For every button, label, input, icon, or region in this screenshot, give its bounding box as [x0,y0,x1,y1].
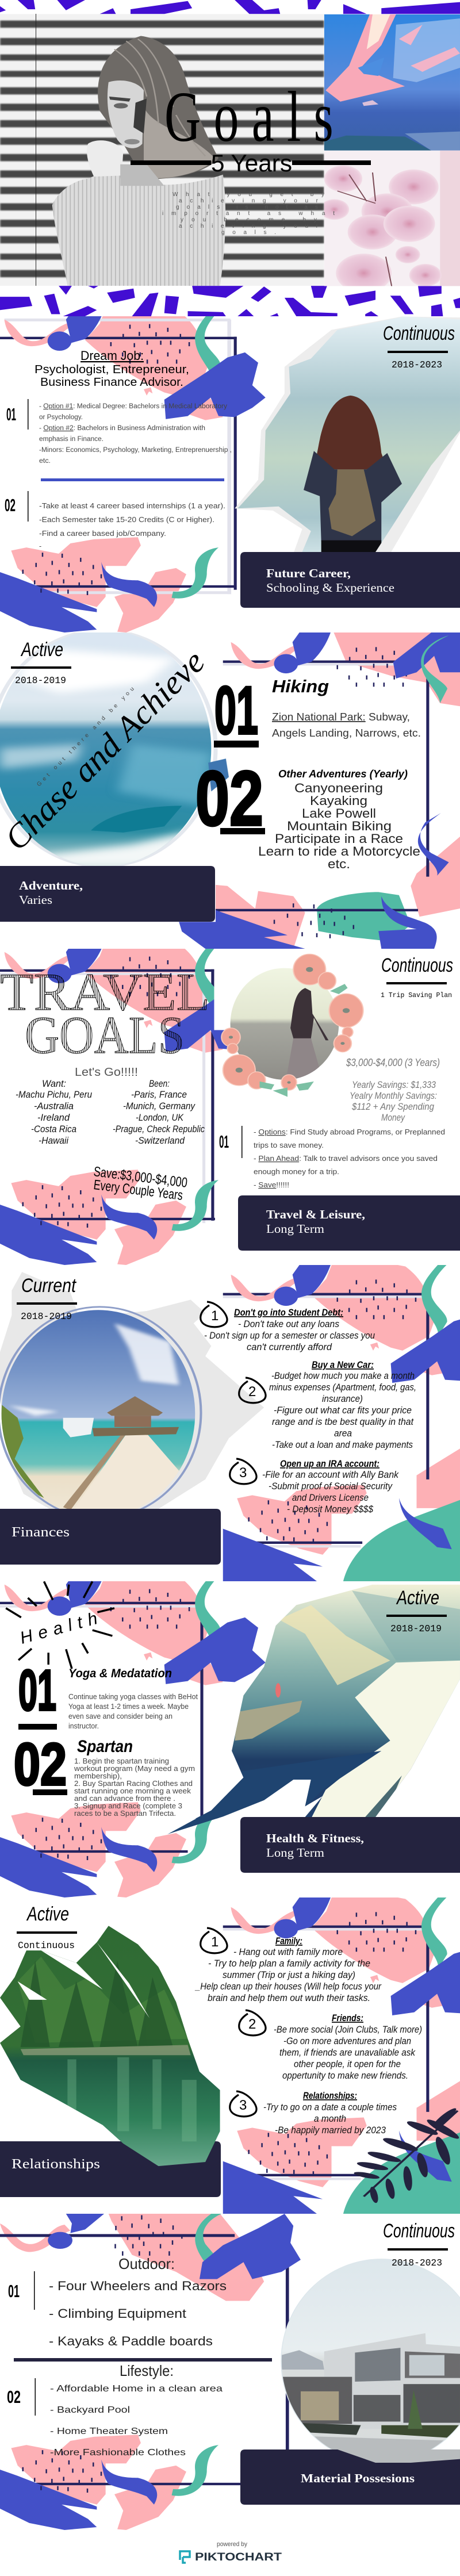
status: Active: Active [396,1587,439,1609]
section: family: summer (Trip or just a hiking day) [223,1969,355,1980]
title box: Adventure, [19,879,83,892]
yoga text: Continue taking yoga classes with BeHot [68,1692,198,1701]
brush art and frame [200,1897,460,2214]
big number 01 [214,673,259,749]
option text: -Minors: Economics, Psychology, Marketing, Entreprenuership , [39,447,232,454]
quote text: goals. [221,229,276,236]
travel options text: trips to save money. [254,1141,324,1149]
title box [240,2450,460,2505]
title box: Future Career, [266,566,351,580]
experience text [39,502,225,550]
panel: future career [0,305,460,632]
section: relationships [263,2090,397,2136]
title box [240,552,460,608]
divider line 01 [28,399,29,430]
advice 1: student debt: can't currently afford [247,1341,332,1352]
plan label: 1 Trip Saving Plan [381,991,452,999]
section: friends [274,2012,422,2081]
experience text: -Take at least 4 career based internships (1 a year). [39,502,225,510]
advice 2: new car: insurance) [322,1393,363,1404]
lifestyle list: - Affordable Home in a clean area [50,2384,223,2394]
list: been: -Paris, France [131,1089,187,1100]
advice 3: IRA: - Deposit Money $$$$ [287,1504,373,1515]
brush art and frame [0,316,460,632]
dates: 2018-2023 [392,2258,442,2269]
dates: 2018-2019 [21,1312,72,1322]
outdoor list: - Kayaks & Paddle boards [49,2334,213,2348]
status rule [17,1931,77,1934]
quote text: What you get by [172,191,324,198]
status: Active: Active [26,1903,69,1925]
number marker 1: 1 [211,1308,218,1324]
quote text [162,191,335,236]
panel: finances [0,1260,460,1581]
title: Goals: Goals [164,78,346,157]
number marker 1: 1 [211,1934,218,1950]
heading: lifestyle: Lifestyle: [120,2362,174,2379]
section: family [194,1935,382,2003]
advice 3: IRA: -File for an account with Ally Bank [262,1469,399,1480]
adventures list: Canyoneering [294,781,383,795]
number marker 3 [230,2091,256,2117]
experience text: - [39,542,41,550]
number 01: 01 [8,2281,20,2301]
number 02: 02 [5,495,16,515]
lifestyle list: - Backyard Pool [50,2405,130,2415]
number marker 2 [239,1378,266,1403]
job list line 1: Psychologist, Entrepreneur, [34,363,189,376]
duration: Continuous [18,1941,75,1952]
hiking details: Zion National Park: Subway, [272,711,410,723]
yoga text: instructor. [68,1722,99,1730]
title box: Finances [12,1525,70,1540]
title: goals: GOALS [25,1006,185,1064]
number 02: 02 [7,2387,21,2407]
adventures list: Mountain Biking [287,819,392,833]
yoga text [68,1692,198,1730]
panel: health and fitness [0,1570,460,1897]
spartan text: workout program (May need a gym [74,1764,195,1773]
divider line 02 [28,491,29,522]
spartan text: start running one morning a week [74,1787,191,1795]
title box [238,1195,460,1251]
travel options text: - Options : Find Study abroad Programs, or Preplanned [254,1128,445,1136]
title box: Long Term [266,1222,324,1236]
lifestyle list [50,2384,223,2458]
travel options text [254,1128,445,1189]
outdoor list: - Four Wheelers and Razors [49,2279,227,2293]
quote text: goals is not as [176,204,318,210]
list: been: -Munich, Germany [123,1101,195,1111]
list: want: -Costa Rica [31,1124,76,1134]
subtitle rule left [131,160,211,165]
spartan text: and can advance from there . [74,1794,175,1803]
savings figures: Money [381,1112,405,1123]
curved tagline script: Chase and Achieve [0,643,212,857]
spartan text [74,1757,195,1818]
status rule [386,982,447,984]
advice 2: new car [269,1359,416,1450]
adventures list: etc. [328,857,350,871]
section: friends: other people, it open for the [294,2058,401,2069]
option text [39,403,232,465]
status rule [388,351,448,353]
dates: 2018-2019 [15,676,66,687]
subtitle rule right [292,160,371,165]
title box: Long Term [266,1846,324,1860]
savings goal text: Every Couple Years [93,1177,183,1203]
big number 01: 01 [214,673,258,749]
section: friends: oppertunity to make new friends. [282,2070,408,2081]
panel: relationships [0,1893,460,2214]
title box: Relationships [12,2157,100,2172]
brush art and frame [0,1265,460,1873]
brush art and frame [0,1581,460,1897]
icon: piktochart logo [180,2551,190,2563]
footer: powered by: powered by [217,2541,247,2548]
big number 01: 01 [18,1658,56,1723]
number marker 3 [230,1459,256,1484]
advice 2: new car: -Take out a loan and make payments [272,1439,413,1450]
panel: adventure [0,627,460,949]
section: family: Family: [275,1935,302,1946]
big number 02: 02 [14,1731,67,1798]
title: travel: TRAVEL [0,963,210,1021]
heading: spartan: Spartan [77,1737,133,1756]
experience text: -Find a career based job/Company. [39,530,166,538]
number marker 1 [201,1928,227,1953]
title box: Schooling & Experience [266,581,394,595]
list: want: -Ireland [37,1112,70,1123]
brush art and frame [0,949,435,1873]
title box: Health & Fitness, [266,1831,364,1845]
list: want: -Australia [34,1101,74,1111]
brush art and frame [0,632,460,949]
advice 3: IRA: and Drivers License [292,1492,369,1503]
section: relationships: -Try to go on a date a couple times [263,2102,397,2113]
divider line 02 [34,2378,36,2416]
image: sky with pink clouds [324,14,460,151]
divider bar [41,478,224,481]
status: Active: Active [20,639,63,661]
title box [0,866,215,922]
savings goal text [93,1164,188,1203]
section: friends: Friends: [332,2012,363,2023]
image: forest lake brush shape [0,1924,223,2168]
list: been: -Switzerland [135,1135,185,1146]
heading: dream job: Dream Job: [80,348,144,363]
hero pattern band: top [0,0,460,14]
number marker 2: 2 [248,1384,256,1400]
heading: outdoor: Outdoor: [118,2255,175,2272]
title box: Varies [19,893,52,907]
adventures list: Kayaking [310,793,367,808]
job list line 2: Business Finance Advisor. [40,376,183,389]
option text: - Option #1: Medical Degree: Bachelors in Medical Laboratory [39,403,227,410]
hiking details [272,711,421,739]
image: modern house oval [279,2259,460,2463]
advice 2: new car: -Figure out what car fits your price [274,1405,412,1416]
spartan text: 1. Begin the spartan training [74,1757,169,1765]
list: want: -Hawaii [39,1135,69,1146]
dates: 2018-2023 [392,360,442,371]
advice 3: IRA: -Submit proof of Social Security [269,1481,393,1492]
travel options text: - Plan Ahead : Talk to travel advisors once you saved [254,1155,438,1163]
section: relationships: -Be happily married by 2023 [275,2125,386,2136]
list: want: -Machu Pichu, Peru [16,1089,92,1100]
section: family: - Hang out with family more [233,1946,343,1957]
subheading: Let's Go!!!!! [75,1066,138,1079]
advice 2: new car: range and is tbe best quality in that [272,1416,414,1427]
advice 3: IRA [262,1458,399,1515]
panel: material possessions [0,2214,460,2530]
big number 02: 02 [195,755,263,842]
adventures list: Participate in a Race [275,831,403,846]
savings goal text: Save:$3,000-$4,000 [93,1164,188,1191]
section: family: _Help clean up their houses (Will help focus your [194,1981,382,1992]
outdoor list: - Climbing Equipment [49,2306,186,2321]
advice 1: student debt: - Don't sign up for a semester or classes you [204,1330,375,1341]
advice 1: student debt: - Don't take out any loans [238,1318,339,1329]
advice 2: new car: area [334,1428,352,1439]
house image lower edge over box [338,2450,460,2463]
savings figures: Yearly Savings: $1,333 [352,1079,436,1090]
heading: hiking: Hiking [272,676,329,696]
title box: Travel & Leisure, [266,1208,365,1221]
big number 01 [18,1658,57,1730]
section: friends: -Be more social (Join Clubs, Talk more) [274,2024,422,2035]
list: been: -Prague, Check Republic [113,1124,205,1134]
title box [240,1817,460,1873]
hero pattern band: bottom [0,286,460,316]
icon: leaf branch [353,2107,460,2203]
panel: future career: 01 [6,404,16,424]
quote text: achieving your [179,198,319,204]
spartan text: 2. Buy Spartan Racing Clothes and [74,1779,193,1788]
outdoor list [49,2279,227,2348]
divider line [241,1126,243,1158]
image: black and white portrait [0,14,324,286]
status: Current: Current [21,1275,76,1297]
advice 1: student debt [204,1307,375,1352]
status rule [388,2248,448,2251]
advice 1: student debt: Don't go into Student Debt: [234,1307,343,1318]
savings figures [346,1057,440,1123]
curved tagline small: Get out there and be you [36,686,136,788]
section: relationships: a month [314,2113,346,2124]
section: friends: -Go on more adventures and plan [283,2035,411,2046]
spartan text: races to be a Spartan Trifecta. [74,1809,176,1818]
quote text: achieving your [179,223,319,229]
quote text: important as what [162,210,335,217]
health sunburst heading: Health [18,1609,99,1648]
list: want: Want: [42,1078,66,1089]
number marker 3: 3 [239,2098,247,2113]
option text: - Option #2: Bachelors in Business Administration with [39,425,205,432]
divider bar [14,2358,272,2362]
travel options text: enough money for a trip. [254,1168,339,1176]
experience text: -Each Semester take 15-20 Credits (C or Higher). [39,516,214,524]
adventures list: Learn to ride a Motorcycle [258,844,420,858]
health sunburst heading [6,1581,114,1669]
advice 3: IRA: Open up an IRA account: [280,1458,379,1469]
number marker 2 [239,2010,266,2035]
travel options text: - Save!!!!!! [254,1181,289,1189]
savings figures: $3,000-$4,000 (3 Years) [346,1057,440,1068]
list: been: -London, UK [136,1112,184,1123]
spartan text: 3. Signup and Race (complete 3 [74,1801,182,1810]
savings figures: $112 + Any Spending [351,1101,434,1112]
advice 2: new car: Buy a New Car: [312,1359,374,1370]
subtitle: 5 Years: 5 Years [211,150,292,177]
section: relationships: Relationships: [303,2090,357,2101]
title box: Material Possesions [301,2471,415,2485]
list: been: Been: [149,1078,170,1089]
lifestyle list: - Home Theater System [50,2426,168,2436]
panel: travel and leisure: 01 [219,1132,229,1152]
footer: piktochart wordmark: PIKTOCHART [195,2551,282,2563]
section: family: brain and help them out wuth their tasks. [208,1992,370,2003]
status rule [11,666,71,669]
status rule [17,1302,77,1305]
option text: etc. [39,458,51,465]
list: been [113,1078,205,1146]
status rule [386,1615,447,1617]
savings figures: Yealry Monthly Savings: [350,1090,437,1101]
heading: other adventures: Other Adventures (Yearly) [278,768,408,780]
title box [0,1509,221,1565]
list: want [16,1078,92,1146]
section: family: - Try to help plan a family activity for the [208,1958,370,1969]
hiking details: Angels Landing, Narrows, etc. [272,727,421,739]
section: friends: them, if friends are unavaliable ask [279,2047,416,2058]
image: cherry blossoms [320,151,460,293]
option text: emphasis in Finance. [39,436,103,443]
number marker 1 [201,1302,227,1327]
adventures list [258,781,420,871]
option text: or Psychology. [39,414,83,421]
quote text: you become by [181,217,317,223]
dates: 2018-2019 [390,1624,442,1635]
heading: yoga: Yoga & Medatation [68,1667,172,1680]
lifestyle list: -More Fashionable Clothes [50,2448,186,2458]
panel: travel and leisure [0,938,460,1265]
spartan text: membership), [74,1772,122,1780]
advice 2: new car: -Budget how much you make a month [271,1370,415,1381]
brush art and frame [0,2214,301,2530]
number marker 2: 2 [248,2017,256,2032]
number marker 3: 3 [239,1465,247,1481]
adventures list: Lake Powell [302,806,376,821]
yoga text: even save and consider being an [68,1712,172,1720]
title box [0,2141,221,2197]
yoga text: Yoga at least 1-2 times a week. Maybe [68,1702,189,1711]
advice 2: new car: minus expenses (Apartment, food, gas, [269,1382,416,1393]
